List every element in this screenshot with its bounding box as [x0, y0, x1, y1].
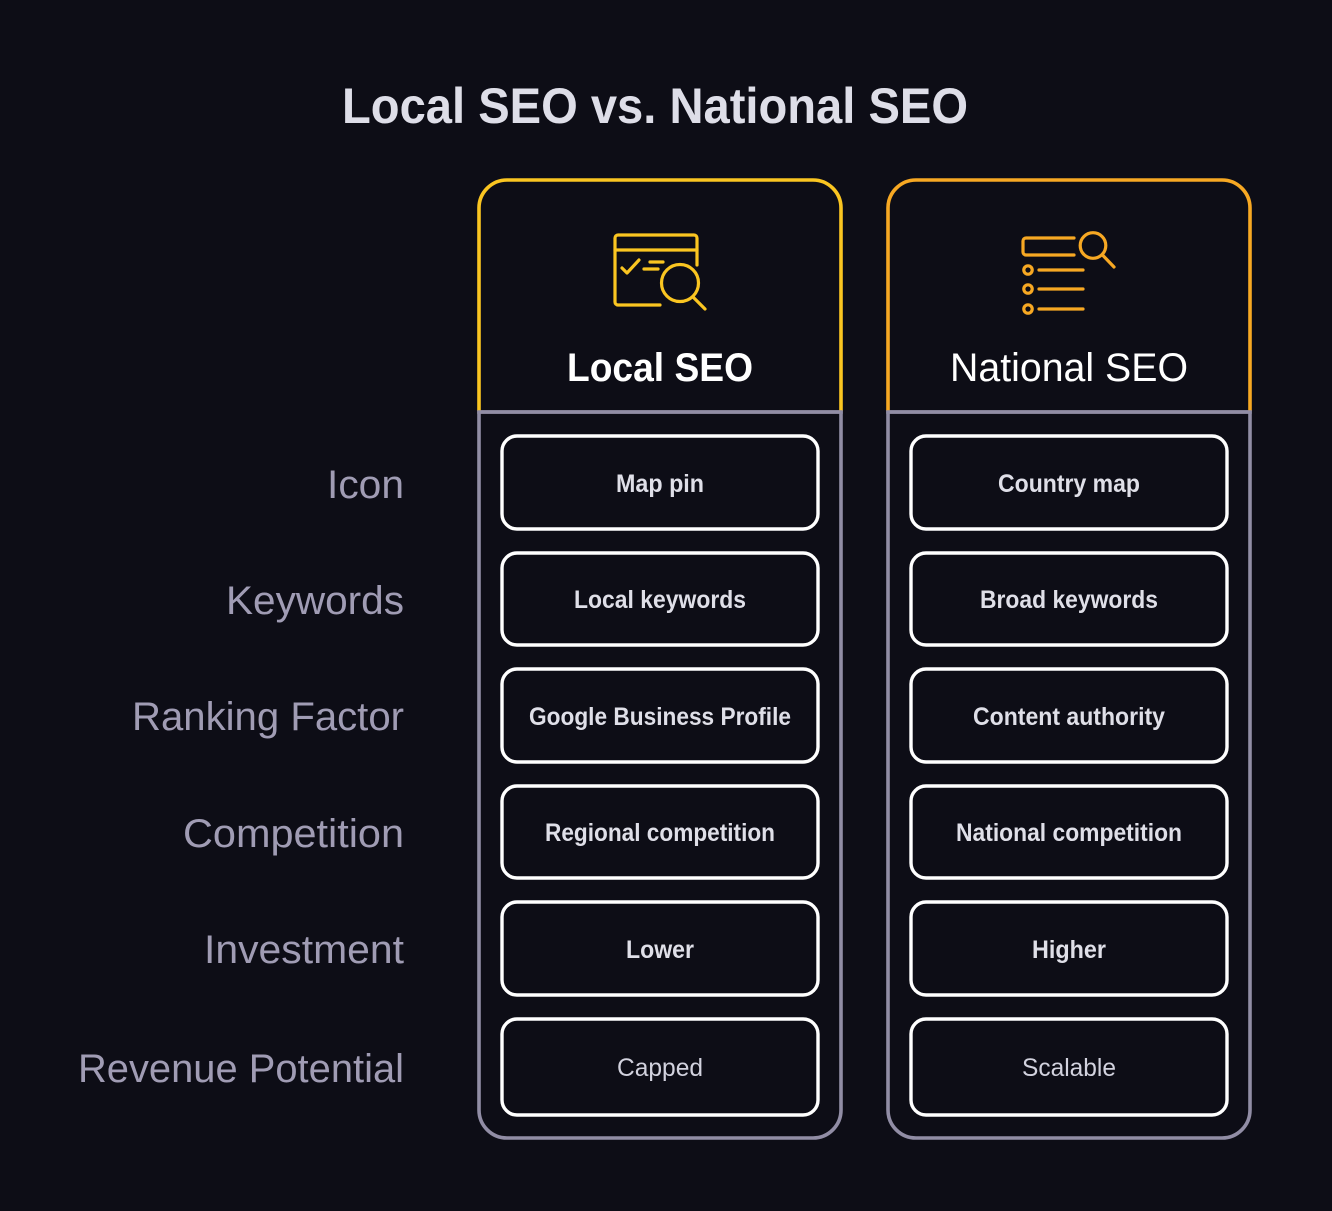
label: Investment: Investment	[204, 928, 404, 972]
cell: Country map	[911, 436, 1227, 529]
panel: Local SEO	[477, 180, 843, 1138]
label: Ranking Factor: Ranking Factor	[132, 695, 404, 739]
cell: Google Business Profile	[502, 669, 818, 762]
cell: Local keywords: Local keywords	[574, 586, 746, 614]
label: Competition: Competition	[183, 812, 404, 856]
cell: Google Business Profile: Google Business Profile	[529, 703, 791, 731]
cell: Scalable	[911, 1019, 1227, 1115]
panel header outline	[479, 180, 841, 411]
cell: Lower	[502, 902, 818, 995]
cell: Capped: Capped	[617, 1054, 703, 1082]
label: Revenue Potential: Revenue Potential	[78, 1047, 404, 1091]
cell: Scalable: Scalable	[1022, 1054, 1116, 1082]
header divider	[477, 410, 843, 414]
panel body outline	[479, 412, 841, 1138]
cell: Content authority: Content authority	[973, 703, 1165, 731]
panel header outline	[888, 180, 1250, 411]
title: Local SEO vs. National SEO	[342, 78, 968, 134]
cell: Regional competition: Regional competition	[545, 819, 775, 847]
row labels	[78, 463, 404, 1091]
cell: Local keywords	[502, 553, 818, 645]
cell: National competition	[911, 786, 1227, 878]
label: Keywords: Keywords	[226, 579, 404, 623]
cell: Capped	[502, 1019, 818, 1115]
cell: Content authority	[911, 669, 1227, 762]
cell: Higher: Higher	[1032, 936, 1106, 964]
panel body outline	[888, 412, 1250, 1138]
column heading: National SEO: National SEO	[950, 346, 1188, 390]
cell: Higher	[911, 902, 1227, 995]
header divider	[886, 410, 1252, 414]
cell: Map pin	[502, 436, 818, 529]
cell: Regional competition	[502, 786, 818, 878]
cell: Broad keywords	[911, 553, 1227, 645]
label: Icon: Icon	[327, 463, 404, 507]
panel: National SEO	[886, 180, 1252, 1138]
cell: National competition: National competition	[956, 819, 1182, 847]
cell: Lower: Lower	[626, 936, 694, 964]
column heading: Local SEO: Local SEO	[567, 346, 753, 390]
cell: Country map: Country map	[998, 470, 1140, 498]
icon: web page with magnifier	[615, 235, 705, 309]
icon: list with magnifier	[1023, 233, 1114, 313]
cell: Broad keywords: Broad keywords	[980, 586, 1158, 614]
cell: Map pin: Map pin	[616, 470, 704, 498]
